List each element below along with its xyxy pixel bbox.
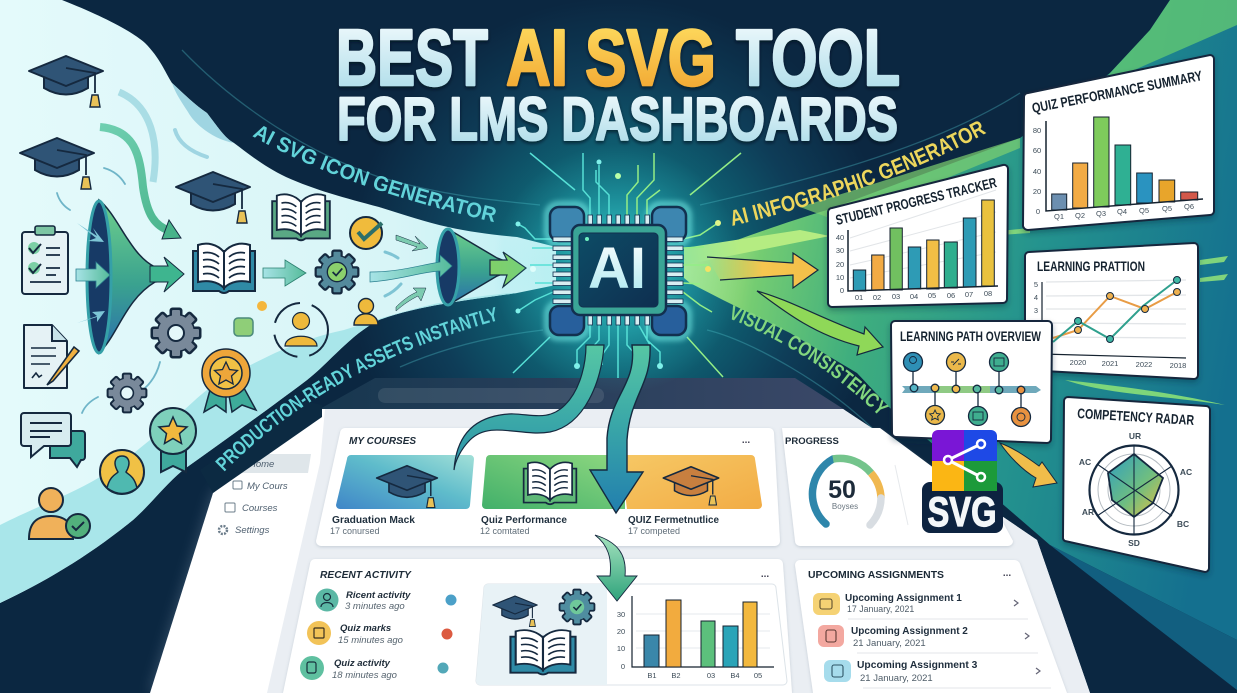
icon: user with cycle arrows xyxy=(274,303,328,357)
icon: orange dot xyxy=(257,301,267,311)
chip outer halo xyxy=(493,144,743,394)
bar chart: recent activity: 20 xyxy=(617,627,625,636)
circuit traces xyxy=(513,153,741,378)
bar chart: student progress: 10 xyxy=(836,273,844,282)
activity row 1: 3 minutes ago xyxy=(345,601,405,612)
bar chart: student progress: 07 xyxy=(965,290,973,299)
assignment row 2 xyxy=(818,625,1038,653)
caption: quiz fermetnutlice: QUIZ Fermetnutlice xyxy=(628,514,719,526)
bar chart: recent activity: 05 xyxy=(754,671,762,680)
bar chart: quiz performance: Q3 xyxy=(1096,209,1106,218)
title: FOR LMS DASHBOARDS xyxy=(337,85,898,153)
line chart: 4 xyxy=(1034,293,1038,302)
icon: checklist clipboard xyxy=(22,226,68,294)
faint guide lines xyxy=(182,50,1020,433)
gauge value: 50 xyxy=(828,476,856,504)
ribbon edge over sidebar xyxy=(200,400,322,493)
dashboard header strip xyxy=(318,378,845,410)
bar chart: recent activity: B1 xyxy=(647,671,657,680)
assignment row 2: Upcoming Assignment 2 xyxy=(851,626,968,637)
panel: quiz performance summary xyxy=(1023,55,1214,230)
caption: quiz performance: 12 comtated xyxy=(480,526,530,536)
icon: green square xyxy=(234,318,253,336)
icon: gear with check xyxy=(316,251,358,293)
bar chart: quiz performance: Q4 xyxy=(1117,207,1127,216)
bar chart: student progress: 40 xyxy=(836,233,844,242)
icon: large book xyxy=(510,630,576,674)
course tile: quiz performance xyxy=(482,455,625,509)
ribbon text: visual consistency: VISUAL CONSISTENCY xyxy=(732,305,889,414)
icon: small grey gear xyxy=(108,374,146,412)
small arrow upper xyxy=(396,235,428,251)
icon: document with pencil xyxy=(24,325,79,388)
line chart: 3 xyxy=(1034,306,1038,315)
trace nodes xyxy=(516,160,721,369)
activity row 1: Ricent activity xyxy=(346,590,411,601)
bar chart: recent activity: 30 xyxy=(617,610,625,619)
icon: user in circle xyxy=(100,450,144,494)
chip dot xyxy=(585,237,589,241)
badge tile xyxy=(932,430,997,492)
caption: quiz fermetnutlice: 17 competed xyxy=(628,526,680,536)
badge label: SVG xyxy=(928,488,996,535)
line chart: 2020 xyxy=(1070,358,1086,367)
bar chart: recent activity xyxy=(617,596,774,680)
small arrow lower xyxy=(396,288,426,311)
activity row 3: 18 minutes ago xyxy=(332,670,397,681)
icon: star ribbon badge xyxy=(150,408,196,472)
line chart: 2018 xyxy=(1170,361,1186,370)
bar chart: student progress xyxy=(836,190,998,302)
bar chart: student progress: 08 xyxy=(984,289,992,298)
bar chart: quiz performance: Q5 xyxy=(1162,204,1172,213)
assignment row 1 xyxy=(813,593,1028,619)
radar chart: BC xyxy=(1177,519,1189,529)
dashboard sheet xyxy=(150,409,1090,693)
sidebar xyxy=(219,454,311,536)
chip inner die xyxy=(579,233,658,307)
bar chart: student progress: 0 xyxy=(840,286,844,295)
radar chart xyxy=(1079,431,1192,548)
sidebar item: courses: Courses xyxy=(242,503,278,514)
inner summary panel xyxy=(476,584,787,685)
radar chart: UR xyxy=(1129,431,1141,441)
caption: graduation mack: Graduation Mack xyxy=(332,514,415,526)
line chart xyxy=(1034,276,1186,370)
heading: competency radar: COMPETENCY RADAR xyxy=(1077,405,1195,428)
heading: student progress tracker: STUDENT PROGRESS TRACKER xyxy=(834,174,998,228)
assignment row 1: 17 January, 2021 xyxy=(847,604,914,614)
panel: student progress tracker xyxy=(828,165,1008,307)
icon: small gear xyxy=(560,590,594,624)
sidebar item: home: Home xyxy=(249,459,274,470)
arrow: green to learning path xyxy=(757,291,883,355)
caption: quiz performance: Quiz Performance xyxy=(481,514,567,526)
small decorative swooshes xyxy=(57,130,401,413)
icon: open book 1 xyxy=(193,244,255,293)
arrow: yellow to student tracker xyxy=(707,253,818,288)
activity row 3: Quiz activity xyxy=(334,658,391,669)
activity row 2: Quiz marks xyxy=(340,623,391,634)
activity row 2 xyxy=(307,621,452,646)
dashboard soft shadow xyxy=(150,418,330,693)
gauge label: Boyses xyxy=(832,502,858,511)
sidebar item: settings: Settings xyxy=(235,525,270,536)
menu dots: ... xyxy=(1003,568,1011,579)
line chart: 5 xyxy=(1034,280,1038,289)
arrow: book to gear xyxy=(263,260,306,286)
radar chart: SD xyxy=(1128,538,1140,548)
icon: small cap xyxy=(493,596,537,627)
panel: progress xyxy=(782,428,1013,546)
icon: chat bubbles xyxy=(21,413,85,467)
course tile: quiz fermetnutlice xyxy=(620,455,762,509)
gauge divider xyxy=(895,465,908,525)
chip cyan glow outline xyxy=(547,204,689,338)
chip label: AI xyxy=(588,236,646,301)
bar chart: student progress: 01 xyxy=(855,293,863,302)
bar chart: quiz performance: Q2 xyxy=(1075,211,1085,220)
icon: user with check xyxy=(29,488,90,539)
left icon cluster xyxy=(20,56,526,539)
ribbon text: AI SVG icon generator: AI SVG ICON GENERATOR xyxy=(252,126,496,222)
arrow: stream from chip to course card xyxy=(454,345,604,470)
bar chart: recent activity: 0 xyxy=(621,662,625,671)
assignment row 3: 21 January, 2021 xyxy=(860,673,933,684)
bar chart: quiz performance: 20 xyxy=(1033,187,1041,196)
bar chart: student progress: 20 xyxy=(836,260,844,269)
bar chart: quiz performance: 80 xyxy=(1033,126,1041,135)
caption: quiz fermetnutlice xyxy=(628,514,719,536)
bar chart: quiz performance: 40 xyxy=(1033,167,1041,176)
bar chart: quiz performance: 0 xyxy=(1036,207,1040,216)
decorative swoosh arrow xyxy=(119,92,155,182)
badge base xyxy=(922,482,1003,533)
badge share glyph xyxy=(944,440,985,481)
assignment row 1: Upcoming Assignment 1 xyxy=(845,593,962,604)
bar chart: student progress: 05 xyxy=(928,291,936,300)
heading: progress: PROGRESS xyxy=(785,436,839,447)
progress gauge xyxy=(812,458,881,525)
icon: SVG badge xyxy=(922,430,1003,535)
menu dots: ... xyxy=(761,569,769,580)
assignment row 3: Upcoming Assignment 3 xyxy=(857,660,978,671)
bar chart: quiz performance: Q5 xyxy=(1139,206,1149,215)
icon: award medal xyxy=(202,349,256,412)
icon: grey gear xyxy=(152,309,200,357)
bar chart: quiz performance: 60 xyxy=(1033,146,1041,155)
chip corner blocks xyxy=(550,207,686,335)
bar chart: student progress: 03 xyxy=(892,292,900,301)
bar chart: recent activity: B2 xyxy=(671,671,681,680)
course tile: graduation xyxy=(336,455,474,509)
bar chart: recent activity: B4 xyxy=(730,671,740,680)
arrow: gear to funnel xyxy=(370,255,452,282)
heading: learning path overview: LEARNING PATH OVERVIEW xyxy=(900,329,1041,344)
title: BEST xyxy=(336,13,488,102)
bar chart: student progress: 06 xyxy=(947,291,955,300)
assignment row 3 xyxy=(824,660,1051,688)
sidebar item: my courses: My Cours xyxy=(247,481,288,492)
bar chart: student progress: 04 xyxy=(910,292,918,301)
panel: green output stream on the right xyxy=(684,0,1237,690)
heading: recent activity: RECENT ACTIVITY xyxy=(320,570,412,581)
AI chip xyxy=(547,204,689,338)
panel: learning prattion line chart xyxy=(1025,243,1198,379)
title: AI SVG xyxy=(506,13,716,102)
timeline xyxy=(902,352,1041,426)
bar chart: student progress: 30 xyxy=(836,246,844,255)
chip board xyxy=(572,225,666,315)
arrow: gold to radar xyxy=(1000,443,1057,487)
activity row 2: 15 minutes ago xyxy=(338,635,403,646)
panel: my courses xyxy=(316,428,780,546)
panel: light input stream on the left xyxy=(0,0,556,603)
panel: learning path overview xyxy=(891,321,1052,443)
icon: graduation cap 3 xyxy=(176,172,250,223)
menu dots: ... xyxy=(742,435,750,446)
title: TOOL xyxy=(736,13,900,102)
bar chart: quiz performance xyxy=(1033,117,1203,221)
caption: quiz performance xyxy=(480,514,567,536)
bar chart: quiz performance: Q6 xyxy=(1184,202,1194,211)
heading: learning prattion: LEARNING PRATTION xyxy=(1037,259,1145,274)
panel: competency radar xyxy=(1063,397,1210,572)
bar chart: student progress: 02 xyxy=(873,293,881,302)
radar chart: AR xyxy=(1082,507,1094,517)
bar chart: recent activity: 03 xyxy=(707,671,715,680)
icon: yellow check badge xyxy=(350,217,382,249)
heading: my courses: MY COURSES xyxy=(349,436,416,447)
bar chart: quiz performance: Q1 xyxy=(1054,212,1064,221)
arrow: blue down arrow xyxy=(590,345,650,513)
ribbon text: AI infographic generator: AI INFOGRAPHIC GENERATOR xyxy=(732,121,986,226)
panel: recent activity xyxy=(283,559,792,693)
line chart: 2022 xyxy=(1136,360,1152,369)
activity row 1 xyxy=(316,588,456,612)
bar chart: recent activity: 10 xyxy=(617,644,625,653)
ribbon text: production-ready assets instantly: PRODUCTION-READY ASSETS INSTANTLY xyxy=(215,306,496,472)
funnel 1 xyxy=(76,200,184,353)
title xyxy=(336,13,900,153)
caption: graduation mack: 17 conursed xyxy=(330,526,380,536)
radar chart: AC xyxy=(1180,467,1192,477)
radar chart: AC xyxy=(1079,457,1091,467)
arrow: cap to book xyxy=(100,127,181,239)
activity row 3 xyxy=(300,656,448,681)
icon: graduation cap 2 xyxy=(20,138,94,189)
funnel 2 xyxy=(437,229,526,305)
assignment row 2: 21 January, 2021 xyxy=(853,638,926,649)
arrow: green down arrow xyxy=(595,535,637,601)
heading: upcoming assignments: UPCOMING ASSIGNMENTS xyxy=(808,569,944,581)
icon: graduation cap 1 xyxy=(29,56,103,107)
line chart: 2021 xyxy=(1102,359,1118,368)
chip pins xyxy=(553,215,683,325)
caption: graduation mack xyxy=(330,514,415,536)
icon: open book 2 xyxy=(272,194,330,240)
panel: upcoming assignments xyxy=(795,560,1067,693)
icon: small user xyxy=(354,298,378,325)
